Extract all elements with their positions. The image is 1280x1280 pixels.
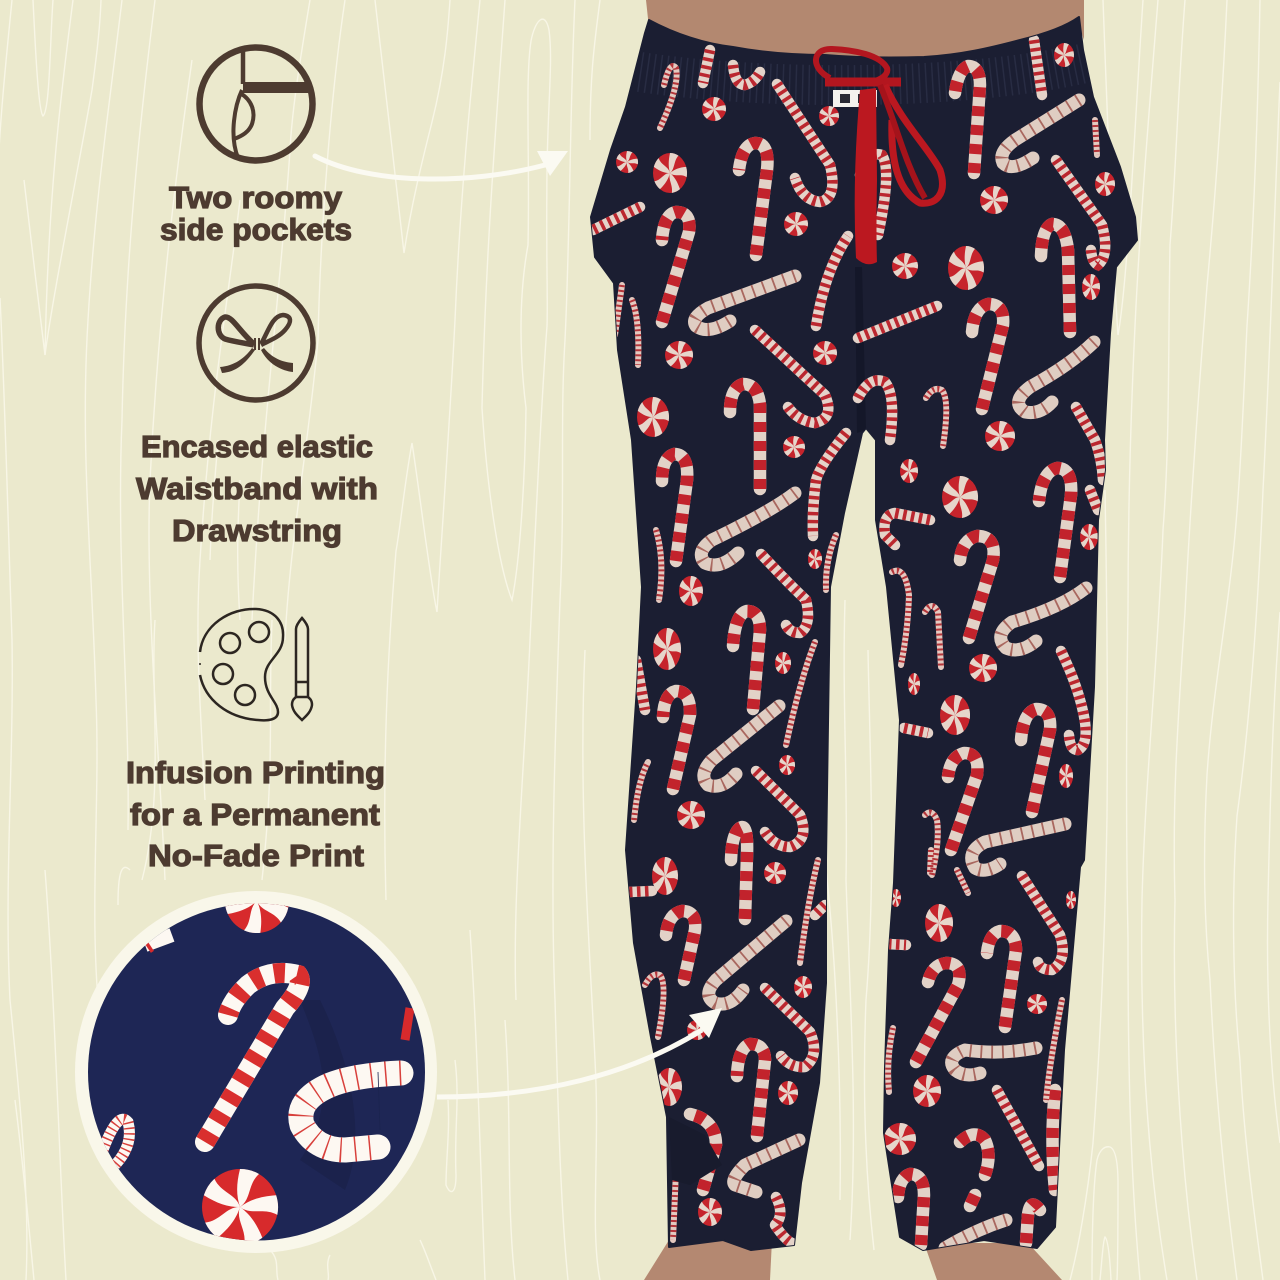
pants: candy canes (593, 40, 1105, 1248)
photo: skin above waistband (646, 0, 1084, 65)
photo: navy candy cane pajama pants (591, 17, 1137, 1250)
callout: fabric close-up circle (75, 857, 437, 1253)
arrow: to side pocket (315, 151, 568, 179)
text: infusion printing: No-Fade Print (148, 838, 364, 873)
text: waistband: Drawstring (172, 513, 342, 548)
text: waistband: Waistband with (136, 471, 378, 506)
text: infusion printing (126, 755, 385, 873)
pants: elastic waistband gathers (640, 62, 1090, 85)
photo: left foot (644, 1240, 772, 1280)
text: waistband: Encased elastic (141, 429, 373, 464)
icon: drawstring bow (199, 286, 313, 400)
icon: palette and paint brush (199, 609, 312, 720)
text: infusion printing: Infusion Printing (126, 755, 385, 790)
text: side pockets: side pockets (160, 212, 352, 247)
photo: right foot (924, 1243, 1062, 1280)
pants: peppermint candies (616, 43, 1116, 1227)
pants: cuff hems (672, 1143, 718, 1182)
close-up: thin-striped candy cane (301, 1072, 401, 1150)
arrow: from fabric close-up to print (437, 1008, 722, 1097)
text: waistband (136, 429, 378, 548)
text: infusion printing: for a Permanent (130, 797, 380, 832)
close-up: main candy cane (205, 973, 300, 1142)
icon: side pocket (200, 48, 312, 160)
text: side pockets (160, 180, 352, 247)
close-up: partial canes (103, 935, 410, 1165)
text: side pockets: Two roomy (169, 180, 343, 215)
drawstring: red tie and waist tag (816, 49, 942, 264)
close-up: peppermint candies (202, 1169, 278, 1240)
waist tag (833, 90, 877, 107)
